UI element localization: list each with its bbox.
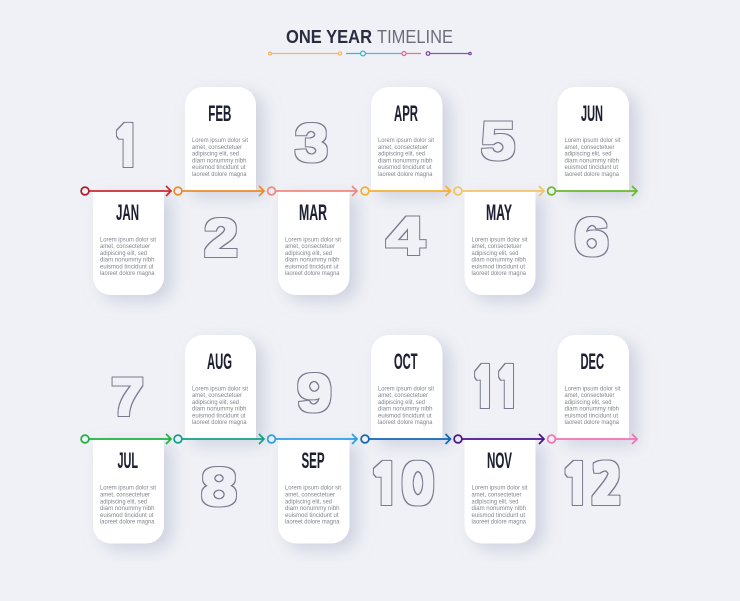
text: MAY body: laoreet dolore magna xyxy=(472,270,527,277)
text: AUG body: diam nonummy nibh xyxy=(192,406,246,413)
text: SEP body: Lorem ipsum dolor sit xyxy=(285,485,341,492)
text: APR body: euismod tincidunt ut xyxy=(378,164,432,171)
numbers: 9 xyxy=(297,364,332,423)
text: DEC body: euismod tincidunt ut xyxy=(564,412,618,419)
text: MAR body: diam nonummy nibh xyxy=(285,257,340,264)
text: JUN body xyxy=(564,137,621,178)
panel: SEP xyxy=(278,439,350,544)
text: MAY body: Lorem ipsum dolor sit xyxy=(472,236,528,243)
text: SEP body: diam nonummy nibh xyxy=(285,505,340,512)
panel: NOV xyxy=(464,439,536,544)
text: MAY body: euismod tincidunt ut xyxy=(472,263,525,270)
text: MAY body xyxy=(472,236,528,277)
text: JAN body: Lorem ipsum dolor sit xyxy=(100,236,156,243)
text: DEC body: laoreet dolore magna xyxy=(564,419,620,426)
text: JAN body: amet, consectetuer xyxy=(100,243,150,250)
text: FEB body: diam nonummy nibh xyxy=(192,157,246,164)
heading: FEB: FEB xyxy=(208,101,231,126)
text: DEC body: amet, consectetuer xyxy=(564,392,614,399)
text: JAN body: euismod tincidunt ut xyxy=(100,263,154,270)
heading: OCT: OCT xyxy=(394,349,418,374)
panel: APR xyxy=(371,87,442,191)
text: JUN body: euismod tincidunt ut xyxy=(564,164,618,171)
text: NOV body: euismod tincidunt ut xyxy=(472,512,525,519)
text: SEP body: adipiscing elit, sed xyxy=(285,498,332,505)
text: SEP body: laoreet dolore magna xyxy=(285,519,340,526)
text: NOV body: laoreet dolore magna xyxy=(472,519,527,526)
text: NOV body: amet, consectetuer xyxy=(472,492,522,498)
text: FEB body: Lorem ipsum dolor sit xyxy=(192,137,248,144)
numbers: 4 xyxy=(386,207,426,266)
text: NOV body: Lorem ipsum dolor sit xyxy=(472,485,528,492)
text: JUN body: diam nonummy nibh xyxy=(564,157,619,164)
text: MAR body: laoreet dolore magna xyxy=(285,270,340,277)
heading: SEP: SEP xyxy=(302,448,324,473)
text: AUG body: Lorem ipsum dolor sit xyxy=(192,385,248,392)
text: JUN body: amet, consectetuer xyxy=(564,144,614,151)
text: DEC body: Lorem ipsum dolor sit xyxy=(564,385,621,392)
numbers: 7 xyxy=(111,368,144,427)
text: OCT body: euismod tincidunt ut xyxy=(378,412,432,419)
numbers: 6 xyxy=(574,208,609,267)
text: AUG body: laoreet dolore magna xyxy=(192,419,247,426)
text: OCT body: adipiscing elit, sed xyxy=(378,399,425,406)
text: NOV body xyxy=(472,485,528,526)
text: FEB body xyxy=(192,137,248,178)
text: JUL body: adipiscing elit, sed xyxy=(100,498,147,505)
text: JUL body: Lorem ipsum dolor sit xyxy=(100,485,156,492)
heading: MAY: MAY xyxy=(486,200,512,225)
text: FEB body: euismod tincidunt ut xyxy=(192,164,246,171)
text: FEB body: adipiscing elit, sed xyxy=(192,151,239,158)
panel: DEC xyxy=(558,335,629,439)
timeline row 1 xyxy=(81,186,637,196)
text: JUL body: laoreet dolore magna xyxy=(100,519,155,526)
panel: OCT xyxy=(371,335,442,439)
text: AUG body: euismod tincidunt ut xyxy=(192,412,246,419)
timeline row 2 xyxy=(81,434,637,444)
text: AUG body xyxy=(192,385,248,426)
text: DEC body xyxy=(564,385,621,426)
numbers: 12 xyxy=(561,458,622,511)
text: JUN body: adipiscing elit, sed xyxy=(564,151,612,158)
text: AUG body: amet, consectetuer xyxy=(192,392,242,399)
panel: JUL: JUL xyxy=(118,448,138,473)
text: JAN body: laoreet dolore magna xyxy=(100,270,155,277)
text: FEB body: amet, consectetuer xyxy=(192,144,242,151)
text: JAN body: diam nonummy nibh xyxy=(100,257,154,264)
text: SEP body: euismod tincidunt ut xyxy=(285,512,339,519)
numbers: 10 xyxy=(369,458,434,511)
text: APR body: Lorem ipsum dolor sit xyxy=(378,137,434,144)
title decorative timeline xyxy=(269,51,471,56)
panel: AUG xyxy=(185,335,256,439)
text: NOV body: adipiscing elit, sed xyxy=(472,498,518,505)
text: JUN body: laoreet dolore magna xyxy=(564,171,620,178)
text: APR body: amet, consectetuer xyxy=(378,144,428,151)
text: JUL body: diam nonummy nibh xyxy=(100,505,154,512)
heading: MAR: MAR xyxy=(299,200,327,225)
heading: DEC: DEC xyxy=(580,349,604,374)
title: ONE YEAR xyxy=(286,26,372,47)
text: MAY body: adipiscing elit, sed xyxy=(472,250,518,257)
numbers: 8 xyxy=(201,458,237,517)
text: MAY body: amet, consectetuer xyxy=(472,243,522,250)
panel: FEB xyxy=(185,87,256,191)
text: APR body: adipiscing elit, sed xyxy=(378,151,425,158)
panel: MAY xyxy=(464,191,536,295)
text: APR body: diam nonummy nibh xyxy=(378,157,432,164)
text: JAN body: adipiscing elit, sed xyxy=(100,250,147,257)
text: APR body: laoreet dolore magna xyxy=(378,171,433,178)
panel: MAR xyxy=(278,191,350,295)
numbers: 11 xyxy=(472,361,520,414)
numbers: 3 xyxy=(295,114,328,173)
numbers: 1 xyxy=(113,120,141,173)
panel: JUN xyxy=(558,87,629,191)
text: MAR body: Lorem ipsum dolor sit xyxy=(285,236,341,243)
text: JAN body xyxy=(100,236,156,277)
text: DEC body: diam nonummy nibh xyxy=(564,406,619,413)
text: APR body xyxy=(378,137,434,178)
panel: JAN xyxy=(93,191,164,295)
title xyxy=(286,26,453,47)
text: SEP body: amet, consectetuer xyxy=(285,492,335,498)
text: JUL body: amet, consectetuer xyxy=(100,492,150,498)
heading: APR: APR xyxy=(394,101,418,126)
heading: NOV: NOV xyxy=(487,448,512,473)
text: MAR body: euismod tincidunt ut xyxy=(285,263,339,270)
text: JUN body: Lorem ipsum dolor sit xyxy=(564,137,621,144)
heading: JAN: JAN xyxy=(116,200,139,225)
text: FEB body: laoreet dolore magna xyxy=(192,171,247,178)
text: JUL body xyxy=(100,485,156,526)
text: OCT body xyxy=(378,385,434,426)
text: MAR body: adipiscing elit, sed xyxy=(285,250,332,257)
text: MAR body xyxy=(285,236,341,277)
numbers: 2 xyxy=(204,209,238,268)
heading: AUG: AUG xyxy=(207,349,232,374)
text: JUL body: euismod tincidunt ut xyxy=(100,512,154,519)
text: OCT body: Lorem ipsum dolor sit xyxy=(378,385,434,392)
panel: JUL xyxy=(93,439,164,544)
text: MAR body: amet, consectetuer xyxy=(285,243,335,250)
text: OCT body: diam nonummy nibh xyxy=(378,406,432,413)
title: TIMELINE xyxy=(377,26,453,47)
text: NOV body: diam nonummy nibh xyxy=(472,505,526,512)
text: SEP body xyxy=(285,485,341,526)
text: OCT body: laoreet dolore magna xyxy=(378,419,433,426)
text: AUG body: adipiscing elit, sed xyxy=(192,399,239,406)
text: OCT body: amet, consectetuer xyxy=(378,392,428,399)
numbers: 5 xyxy=(481,112,515,171)
text: DEC body: adipiscing elit, sed xyxy=(564,399,612,406)
panel: JUN: JUN xyxy=(581,101,603,126)
numbers xyxy=(111,112,622,517)
text: MAY body: diam nonummy nibh xyxy=(472,257,526,264)
